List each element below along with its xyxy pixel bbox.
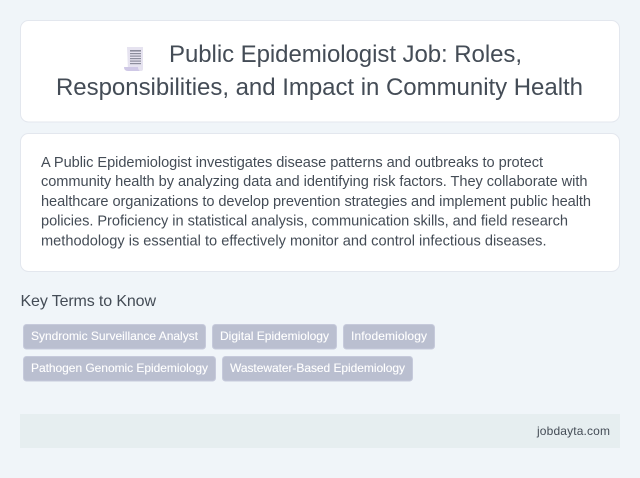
description line 5: methodology is essential to effectively monitor and control infectious diseases. — [41, 234, 546, 250]
tag: Digital Epidemiology — [212, 324, 336, 349]
heading: key terms: Key Terms to Know — [20, 293, 156, 310]
description line 2: community health by analyzing data and identifying risk factors. They collaborate with — [41, 174, 588, 190]
title line 1: Public Epidemiologist Job: Roles, — [169, 41, 522, 68]
tag: Pathogen Genomic Epidemiology — [24, 356, 216, 381]
description line 1: A Public Epidemiologist investigates disease patterns and outbreaks to protect — [41, 155, 543, 171]
title line 2: Responsibilities, and Impact in Community Health — [56, 74, 583, 101]
tag: Infodemiology: Infodemiology — [351, 329, 427, 343]
description line 3: healthcare organizations to develop prevention strategies and implement public health — [41, 194, 591, 210]
description line 4: policies. Proficiency in statistical analysis, communication skills, and field research — [41, 214, 568, 230]
tag: Wastewater-Based Epidemiology — [222, 356, 412, 381]
icon: document scroll — [124, 47, 143, 71]
tag: Syndromic Surveillance Analyst — [24, 324, 206, 349]
tag: Wastewater-Based Epidemiology: Wastewater-Based Epidemiology — [230, 361, 405, 375]
tag: Syndromic Surveillance Analyst: Syndromic Surveillance Analyst — [31, 329, 199, 343]
tag: Pathogen Genomic Epidemiology: Pathogen Genomic Epidemiology — [31, 361, 208, 375]
footer bar — [20, 414, 620, 448]
panel: title card — [20, 20, 620, 122]
footer text: jobdayta.com — [536, 424, 610, 438]
tag: Infodemiology — [344, 324, 434, 349]
panel: description card — [20, 134, 620, 272]
tag: Digital Epidemiology: Digital Epidemiology — [220, 329, 329, 343]
